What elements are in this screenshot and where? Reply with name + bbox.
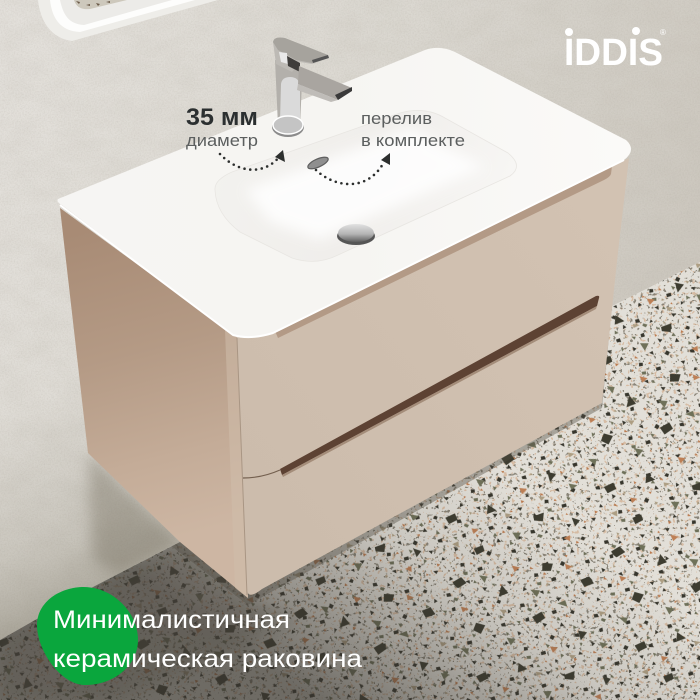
- headline: [53, 606, 362, 673]
- basin: [215, 110, 517, 261]
- callout: 35 mm diameter: [186, 104, 258, 150]
- chrome faucet: [272, 38, 352, 137]
- cabinet front: [237, 158, 629, 595]
- 35 mm diameter ring: [273, 116, 303, 134]
- mirror with backlight: [38, 0, 218, 41]
- drawer divider: [243, 470, 280, 478]
- overflow hole: [306, 155, 330, 171]
- upper drawer slot: [275, 166, 612, 338]
- green blob badge: [37, 587, 138, 685]
- arrow: overflow callout: [316, 153, 390, 184]
- callout: overflow included: в комплекте: [361, 132, 465, 150]
- callout: overflow included: перелив: [361, 110, 432, 128]
- logo: IDDIS: ®: [660, 28, 666, 37]
- lower drawer slot: [280, 296, 599, 475]
- arrow: diameter to faucet hole: [220, 150, 285, 170]
- callout: 35 mm diameter: диаметр: [186, 132, 258, 150]
- headline: керамическая раковина: [53, 645, 362, 673]
- logo: IDDIS: IDDIS: [564, 32, 663, 74]
- headline: Минималистичная: [53, 606, 290, 634]
- callout: overflow included: [361, 110, 465, 150]
- drain plug: [337, 224, 375, 245]
- cabinet left side: [60, 208, 248, 598]
- terrazzo floor: [0, 260, 700, 700]
- ceramic sink top: [58, 48, 631, 337]
- vanity cabinet: [60, 158, 629, 598]
- callout: 35 mm diameter: 35 мм: [186, 104, 258, 131]
